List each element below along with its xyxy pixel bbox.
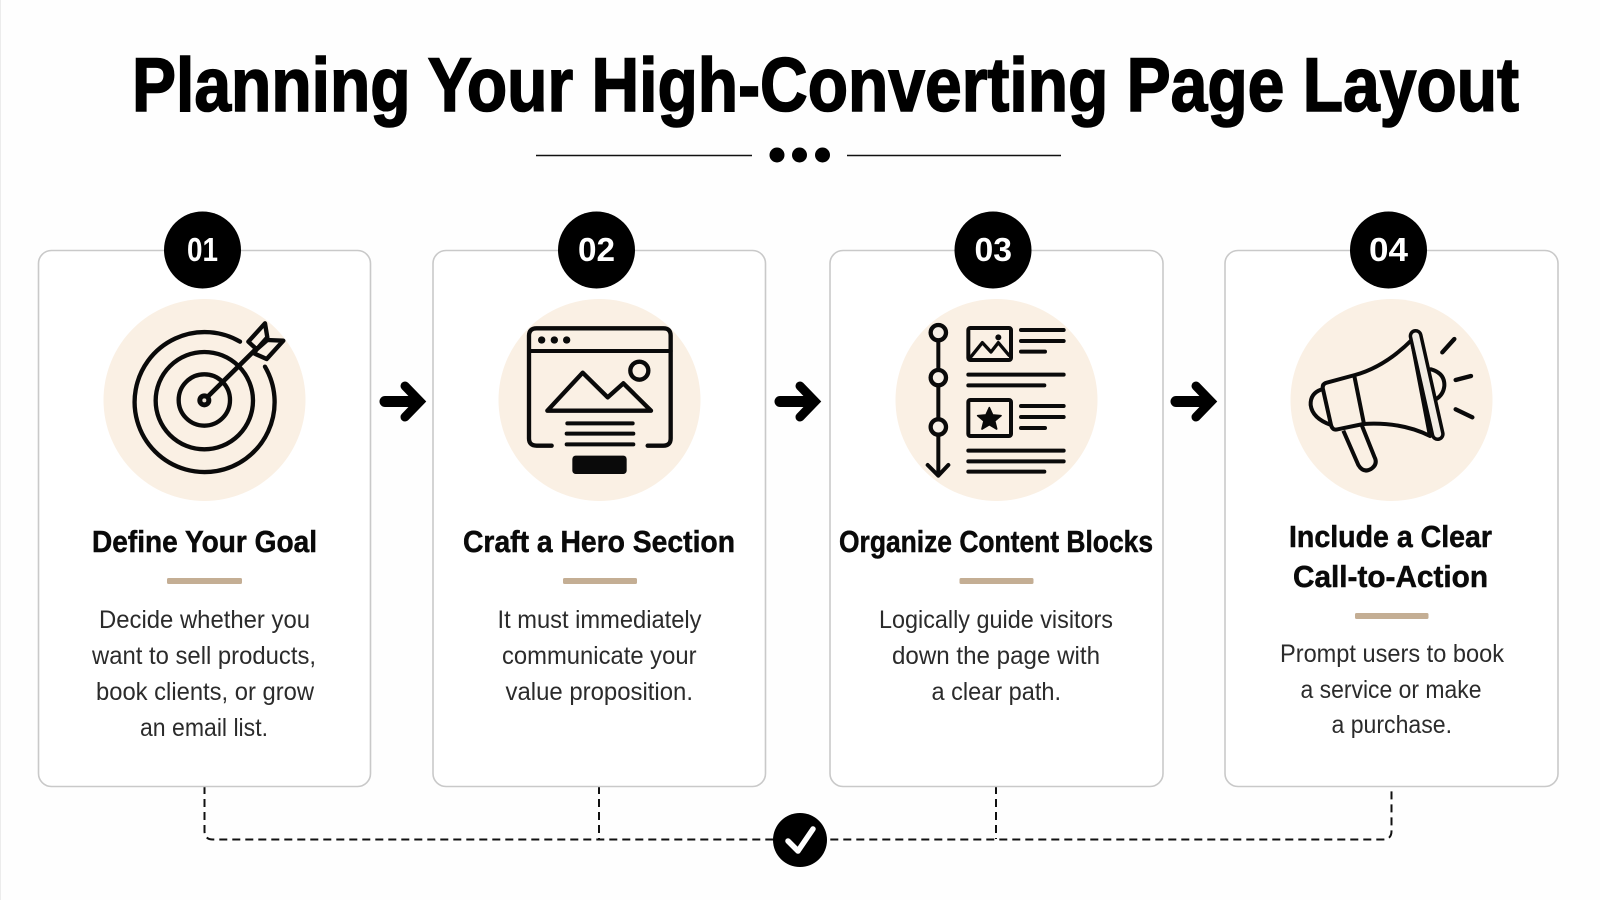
body text 3: Logically guide visitors [879, 606, 1113, 634]
heading 1: Define Your Goal [92, 524, 317, 559]
icon circle 3 [896, 299, 1098, 501]
body text 2: value proposition. [506, 678, 693, 706]
icon: check badge [773, 813, 827, 867]
panel: step 2 craft a hero section [433, 212, 766, 786]
body text 4: Prompt users to book [1280, 640, 1504, 668]
number badge 03: 03 [974, 231, 1012, 268]
body text 2 [498, 606, 702, 706]
panel: step 1 define your goal [38, 212, 370, 786]
number badge 03 [954, 212, 1032, 288]
icon circle 4 [1290, 299, 1492, 501]
number badge 01 [164, 212, 241, 288]
arrow 1 to 2 [385, 386, 420, 417]
number badge 01: 01 [187, 231, 218, 268]
icon: content layout with timeline [928, 325, 1064, 476]
accent rule 3 [960, 578, 1034, 584]
heading 4 [1289, 519, 1492, 594]
number badge 02 [558, 212, 635, 288]
heading 3: Organize Content Blocks [839, 524, 1153, 559]
heading 2: Craft a Hero Section [463, 524, 735, 559]
icon circle 1 [104, 299, 306, 501]
body text 1: Decide whether you [99, 606, 310, 634]
body text 2: communicate your [502, 642, 696, 670]
accent rule 4 [1355, 613, 1428, 619]
icon: browser window with hero image [529, 328, 671, 474]
body text 1: an email list. [140, 714, 268, 742]
body text 4 [1280, 640, 1504, 739]
card outline 1 [38, 250, 370, 786]
title divider with dots [536, 148, 1061, 162]
heading 4: Call-to-Action [1293, 559, 1488, 594]
body text 3: a clear path. [932, 678, 1061, 706]
card outline 4 [1225, 250, 1558, 786]
heading 4: Include a Clear [1289, 519, 1492, 554]
panel: step 3 organize content blocks [830, 212, 1163, 786]
connector: dashed line joining cards [204, 786, 1392, 840]
icon: megaphone [1311, 336, 1472, 470]
icon circle 2 [498, 299, 700, 501]
body text 1: book clients, or grow [96, 678, 315, 706]
card outline 3 [830, 250, 1163, 786]
accent rule 2 [563, 578, 637, 584]
body text 4: a service or make [1300, 676, 1482, 704]
body text 2: It must immediately [498, 606, 702, 634]
number badge 04 [1350, 212, 1427, 288]
body text 3: down the page with [892, 642, 1100, 670]
body text 1: want to sell products, [91, 642, 316, 670]
accent rule 1 [167, 578, 242, 584]
arrow 3 to 4 [1176, 386, 1211, 417]
body text 1 [91, 606, 316, 742]
number badge 04: 04 [1369, 231, 1409, 268]
card outline 2 [433, 250, 766, 786]
arrow 2 to 3 [780, 386, 815, 417]
body text 4: a purchase. [1332, 711, 1452, 739]
panel: step 4 include a clear call-to-action [1225, 212, 1558, 786]
number badge 02: 02 [578, 231, 615, 268]
icon: target with arrow [135, 323, 283, 472]
body text 3 [879, 606, 1113, 706]
